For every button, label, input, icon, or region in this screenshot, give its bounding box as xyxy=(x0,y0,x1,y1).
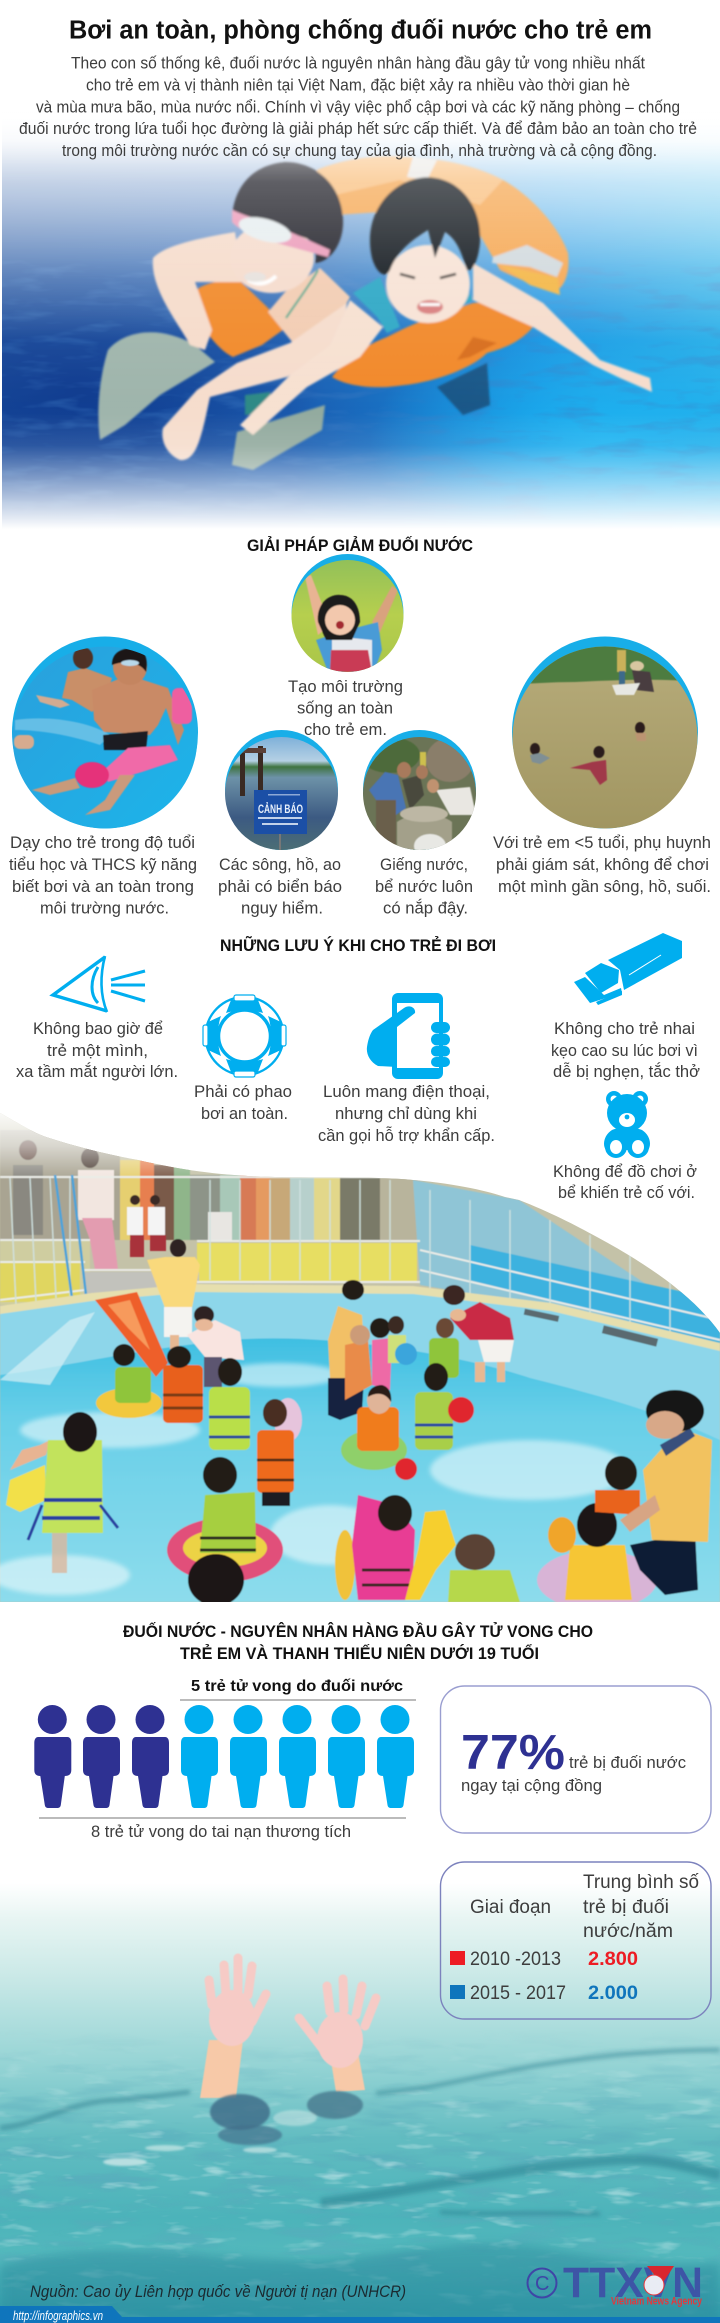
heading: notes: NHỮNG LƯU Ý KHI CHO TRẺ ĐI BƠI xyxy=(220,935,496,955)
fence rails xyxy=(0,1177,720,1340)
kid with ring centre xyxy=(167,1518,283,1582)
caption: bơi an toàn. xyxy=(201,1104,288,1123)
giraffe float xyxy=(405,1510,456,1600)
column header: average xyxy=(583,1872,699,1942)
caption: bể khiến trẻ cố với. xyxy=(558,1183,695,1202)
caption: tiểu học và THCS kỹ năng xyxy=(9,855,197,874)
kid orange right xyxy=(595,1490,640,1515)
teacher yellow xyxy=(328,1306,366,1378)
dark wave bands xyxy=(0,2050,720,2214)
background wall and stripes xyxy=(0,1130,120,1240)
background kids xyxy=(130,1195,140,1205)
caption xyxy=(218,855,342,918)
ring left lobe xyxy=(193,280,287,357)
icon: life ring xyxy=(203,995,286,1077)
kid green xyxy=(429,1338,459,1378)
right child arm right xyxy=(473,263,652,392)
row: 2010-2013: 2010 -2013 xyxy=(470,1949,561,1970)
column header: period: Giai đoạn xyxy=(470,1897,551,1918)
heading: drowning statistics: TRẺ EM VÀ THANH THIẾU NIÊN DƯỚI 19 TUỔI xyxy=(180,1644,539,1663)
photo circle: swimming lesson xyxy=(9,636,200,918)
water xyxy=(0,1338,720,1602)
stat text xyxy=(461,1753,686,1795)
kid pink xyxy=(335,1530,355,1600)
caption: Phải có phao xyxy=(194,1082,292,1101)
heading: solutions: GIẢI PHÁP GIẢM ĐUỐI NƯỚC xyxy=(247,535,473,555)
photo circle: children in river xyxy=(493,636,711,896)
row: 2015-2017 xyxy=(450,1983,638,2004)
caption: môi trường nước. xyxy=(40,898,169,918)
icon: eye xyxy=(53,956,145,1012)
heading: drowning statistics: ĐUỐI NƯỚC - NGUYÊN NHÂN HÀNG ĐẦU GÂY TỬ VONG CHO xyxy=(123,1621,593,1641)
right child arm going into the water xyxy=(240,300,383,435)
photo circle: people covering well xyxy=(360,730,477,918)
heading: drowning statistics xyxy=(123,1621,593,1663)
tip: eye xyxy=(16,956,178,1081)
man red shirt xyxy=(450,1302,514,1340)
dark figures xyxy=(34,1705,169,1808)
intro text xyxy=(19,55,697,160)
table panel: drowning per period xyxy=(440,1862,711,2019)
held kid xyxy=(345,1340,372,1400)
kid lime bottom xyxy=(448,1570,520,1602)
legs under water xyxy=(98,332,215,440)
column header: average: nước/năm xyxy=(583,1921,673,1942)
caption: Các sông, hồ, ao xyxy=(219,855,341,874)
right child face xyxy=(386,245,470,323)
caption xyxy=(288,677,403,739)
background adults xyxy=(19,1140,37,1160)
caption: biết bơi và an toàn trong xyxy=(12,877,194,896)
ring back xyxy=(317,156,569,288)
caption xyxy=(194,1082,292,1123)
logo: TTXVN: C xyxy=(535,2273,549,2295)
left child hair xyxy=(232,162,343,263)
intro text: đuối nước trong lứa tuổi học đường là giải pháp hết sức cấp thiết. Và để đảm bảo an toàn cho trẻ xyxy=(19,120,697,138)
slide xyxy=(95,1292,168,1377)
left child torso xyxy=(268,268,350,343)
photo: children in swim ring xyxy=(2,142,720,526)
left child face xyxy=(235,231,316,294)
caption: Không bao giờ để xyxy=(33,1019,163,1038)
intro text: và mùa mưa bão, mùa nước nổi. Chính vì vậy việc phổ cập bơi và các kỹ năng phòng – chống xyxy=(36,98,680,116)
logo: TTXVN: TTXVN xyxy=(563,2259,703,2307)
warning sign: CẢNH BÁO xyxy=(258,803,303,816)
pool wall xyxy=(0,1292,720,1440)
right child hair xyxy=(370,177,480,274)
bottom water photo xyxy=(0,1883,720,2323)
label: 5 drowned: 5 trẻ tử vong do đuối nước xyxy=(191,1678,403,1695)
tip: chewing gum xyxy=(551,933,700,1081)
kid orange centre xyxy=(257,1430,294,1493)
man white shirt xyxy=(187,1320,244,1360)
source: Nguồn: Cao ủy Liên hợp quốc về Người tị nạn (UNHCR) xyxy=(30,2282,406,2301)
caption: một mình gần sông, hồ, suối. xyxy=(498,877,711,896)
url: http://infographics.vn xyxy=(13,2309,103,2323)
light figures xyxy=(181,1705,414,1808)
caption: dễ bị nghẹn, tắc thở xyxy=(553,1062,700,1081)
icon: teddy bear xyxy=(604,1091,650,1158)
caption: phải giám sát, không để chơi xyxy=(496,855,709,874)
caption: cần gọi hỗ trợ khẩn cấp. xyxy=(318,1126,495,1145)
caption: Giếng nước, xyxy=(380,855,468,874)
caption xyxy=(9,833,197,918)
caption: Không để đồ chơi ở xyxy=(553,1162,697,1181)
big number: 77% xyxy=(461,1726,565,1780)
ring front lobe xyxy=(332,303,533,387)
icon: chewing gum xyxy=(574,933,682,1005)
tip: phone xyxy=(318,993,495,1145)
caption: Tạo môi trường xyxy=(288,677,403,696)
kid bottom right with ring xyxy=(537,1550,657,1610)
caption: nhưng chỉ dùng khi xyxy=(335,1104,477,1123)
caption: sống an toàn xyxy=(297,698,393,718)
caption: trẻ một mình, xyxy=(47,1041,148,1060)
caption: Dạy cho trẻ trong độ tuổi xyxy=(10,833,195,852)
kid big left xyxy=(10,1440,50,1470)
tip: life ring xyxy=(194,995,292,1123)
tip: teddy bear xyxy=(553,1091,697,1202)
kid on slide xyxy=(96,1388,162,1418)
caption: Luôn mang điện thoại, xyxy=(323,1082,490,1101)
caption: phải có biển báo xyxy=(218,877,342,896)
caption: Không cho trẻ nhai xyxy=(554,1019,695,1038)
caption xyxy=(493,833,711,896)
caption xyxy=(553,1162,697,1202)
right child swimsuit xyxy=(353,277,400,333)
caption xyxy=(16,1019,178,1081)
kid lime xyxy=(209,1387,250,1450)
standing woman xyxy=(147,1257,200,1308)
footer bar xyxy=(0,2306,720,2323)
drowning hands xyxy=(200,1958,376,2098)
row: 2010-2013 xyxy=(450,1949,638,1970)
caption: cho trẻ em. xyxy=(304,720,387,739)
row: 2010-2013: 2.800 xyxy=(588,1949,638,1970)
water splash over arms xyxy=(103,2091,363,2166)
column header: average: trẻ bị đuối xyxy=(583,1897,669,1918)
photo circle: child in field xyxy=(288,554,405,739)
caption: có nắp đậy. xyxy=(383,898,468,918)
icon: hand holding phone xyxy=(367,993,450,1079)
stat text: trẻ bị đuối nước xyxy=(569,1753,686,1772)
teacher right xyxy=(630,1530,698,1595)
pictogram: 8 children xyxy=(34,1678,416,1841)
intro text: trong môi trường nước cần có sự chung tay của gia đình, nhà trường và cả cộng đồng. xyxy=(62,142,657,160)
caption xyxy=(375,855,473,918)
caption: kẹo cao su lúc bơi vì xyxy=(551,1041,698,1060)
caption: nguy hiểm. xyxy=(241,898,323,918)
caption xyxy=(318,1082,495,1145)
caption: xa tầm mắt người lớn. xyxy=(16,1062,178,1081)
kid orange in ring xyxy=(341,1430,407,1470)
caption xyxy=(551,1019,700,1081)
kid green red ball xyxy=(415,1392,453,1450)
row: 2015-2017: 2015 - 2017 xyxy=(470,1983,566,2004)
label: 8 injury deaths: 8 trẻ tử vong do tai nạn thương tích xyxy=(91,1822,351,1841)
row: 2015-2017: 2.000 xyxy=(588,1983,638,2004)
left child lower arm xyxy=(162,303,347,460)
photo: children in pool xyxy=(0,1100,720,1610)
caption: Với trẻ em <5 tuổi, phụ huynh xyxy=(493,833,711,852)
column header: average: Trung bình số xyxy=(583,1872,699,1893)
stat panel: 77% xyxy=(440,1686,711,1833)
photo circle: warning sign at lake xyxy=(218,730,342,918)
kid orange xyxy=(163,1365,203,1423)
stat text: ngay tại cộng đồng xyxy=(461,1776,602,1795)
left child arm xyxy=(153,232,243,350)
intro text: cho trẻ em và vị thành niên tại Việt Nam, đặc biệt xảy ra nhiều vào thời gian hè xyxy=(86,76,630,94)
title: Bơi an toàn, phòng chống đuối nước cho trẻ em xyxy=(69,17,652,45)
caption: bể nước luôn xyxy=(375,877,473,896)
intro text: Theo con số thống kê, đuối nước là nguyên nhân hàng đầu gây tử vong nhiều nhất xyxy=(71,55,645,73)
